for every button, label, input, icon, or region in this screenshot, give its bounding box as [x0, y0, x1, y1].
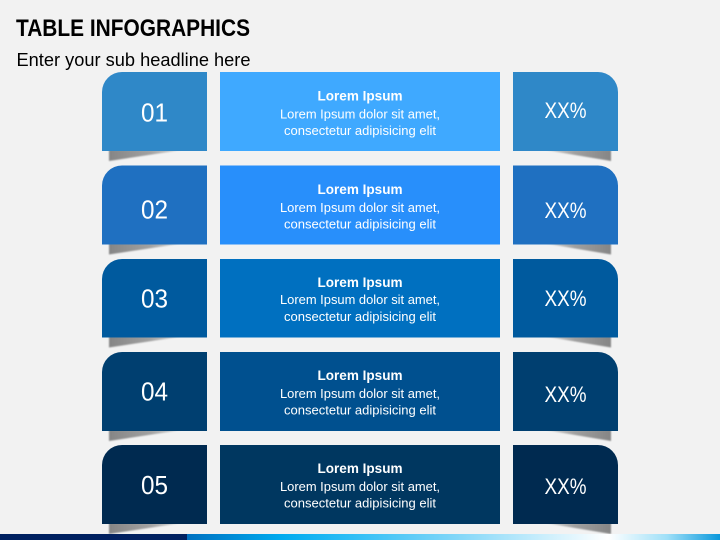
row 4 value tab	[513, 352, 618, 431]
row 4 text panel: Lorem Ipsum	[318, 367, 402, 383]
row 5 text panel	[220, 445, 500, 524]
row 3 text panel: Lorem Ipsum dolor sit amet,	[280, 292, 440, 307]
row 3	[102, 259, 618, 348]
row 4 text panel: Lorem Ipsum dolor sit amet,	[280, 386, 440, 401]
title: TABLE INFOGRAPHICS	[16, 15, 250, 42]
row 2 text panel: Lorem Ipsum dolor sit amet,	[280, 200, 440, 215]
row 2 text panel: Lorem Ipsum	[318, 181, 402, 197]
row 2 text panel: consectetur adipisicing elit	[284, 216, 436, 232]
row 5 value tab: XX%	[544, 474, 586, 499]
row 1 text panel	[220, 72, 500, 151]
row 5 value tab	[513, 445, 618, 524]
row 1 number tab: 01	[141, 98, 168, 128]
row 2 text panel	[220, 166, 500, 244]
row 2 number tab: 02	[141, 194, 168, 224]
row 5 text panel: consectetur adipisicing elit	[284, 496, 436, 510]
row 1 text panel: consectetur adipisicing elit	[284, 123, 436, 138]
row 5 text panel: Lorem Ipsum dolor sit amet,	[280, 479, 440, 494]
row 1 text panel: Lorem Ipsum dolor sit amet,	[280, 106, 440, 122]
row 2	[102, 166, 618, 254]
row 1 text panel: Lorem Ipsum	[318, 88, 402, 104]
row 2 value tab: XX%	[544, 198, 586, 223]
row 2 value tab	[513, 166, 618, 244]
row 1 number tab	[102, 72, 207, 151]
bottom colour bar	[0, 534, 720, 540]
row 5 number tab: 05	[141, 470, 168, 500]
row 3 value tab: XX%	[544, 286, 586, 311]
row 5 text panel: Lorem Ipsum	[318, 460, 402, 476]
row 4	[102, 352, 618, 441]
row 3 text panel: consectetur adipisicing elit	[284, 309, 436, 324]
row 3 value tab	[513, 259, 618, 338]
row 1	[102, 72, 618, 161]
row 4 number tab	[102, 352, 207, 431]
row 4 value tab: XX%	[544, 382, 586, 407]
row 3 number tab: 03	[141, 284, 168, 314]
row 5 number tab	[102, 445, 207, 524]
row 3 text panel: Lorem Ipsum	[318, 274, 402, 290]
row 5	[102, 445, 618, 534]
row 3 text panel	[220, 259, 500, 338]
row 1 value tab: XX%	[544, 98, 586, 123]
row 4 number tab: 04	[141, 376, 168, 406]
row 2 number tab	[102, 166, 207, 244]
row 1 value tab	[513, 72, 618, 151]
row 4 text panel: consectetur adipisicing elit	[284, 402, 436, 418]
row 4 text panel	[220, 352, 500, 431]
sub headline: Enter your sub headline here	[16, 49, 250, 70]
row 3 number tab	[102, 259, 207, 338]
